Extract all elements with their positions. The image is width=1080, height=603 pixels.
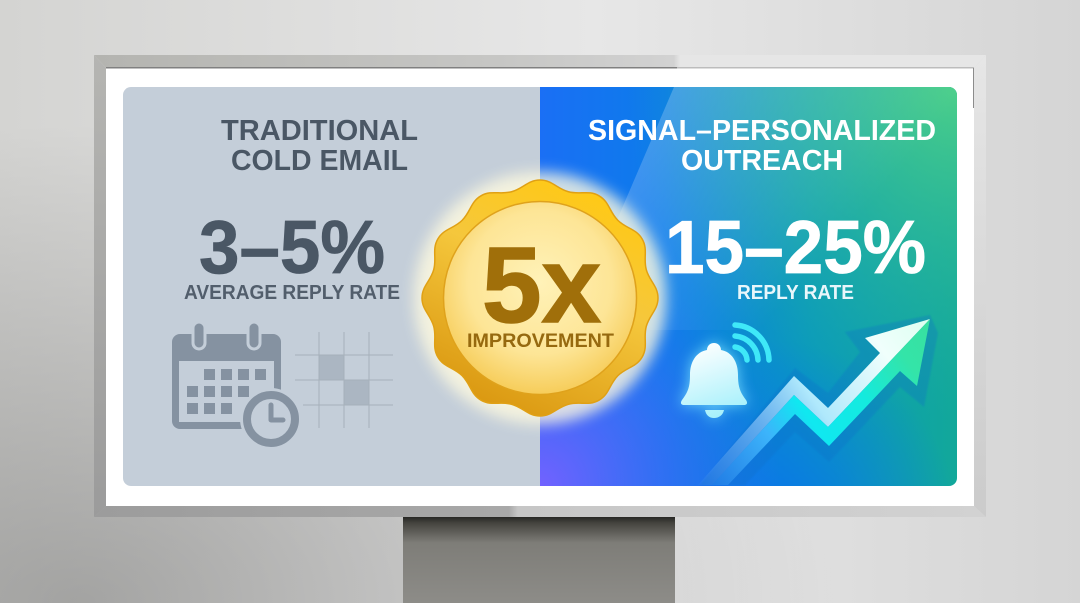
diagonal light sheen <box>570 87 957 330</box>
label: reply rate: REPLY RATE <box>737 281 854 304</box>
heading: traditional cold email: COLD EMAIL <box>231 145 408 177</box>
monitor stand <box>403 517 675 603</box>
badge: 5x improvement <box>414 172 666 424</box>
heading: traditional cold email: TRADITIONAL <box>221 115 418 147</box>
icon: bell with signal waves <box>681 325 769 418</box>
heading: signal-personalized outreach <box>588 115 936 177</box>
panel: signal-personalized outreach <box>540 87 957 486</box>
stat: 3-5%: 3–5% <box>199 205 385 289</box>
stat: 15-25%: 15–25% <box>665 205 926 289</box>
heading: traditional cold email <box>221 115 418 177</box>
icon: rising arrow <box>698 315 938 485</box>
icon: faded grid <box>295 332 393 428</box>
label: improvement: IMPROVEMENT <box>467 330 614 352</box>
icon: calendar with clock <box>172 322 302 450</box>
panel: traditional cold email <box>123 87 540 486</box>
heading: signal-personalized outreach: SIGNAL–PERSONALIZED <box>588 115 936 147</box>
inner medallion <box>444 202 636 394</box>
value: 5x: 5x <box>482 224 601 345</box>
label: average reply rate: AVERAGE REPLY RATE <box>184 281 400 304</box>
monitor frame <box>94 55 986 517</box>
heading: signal-personalized outreach: OUTREACH <box>681 145 843 177</box>
scalloped gold seal <box>422 180 658 416</box>
